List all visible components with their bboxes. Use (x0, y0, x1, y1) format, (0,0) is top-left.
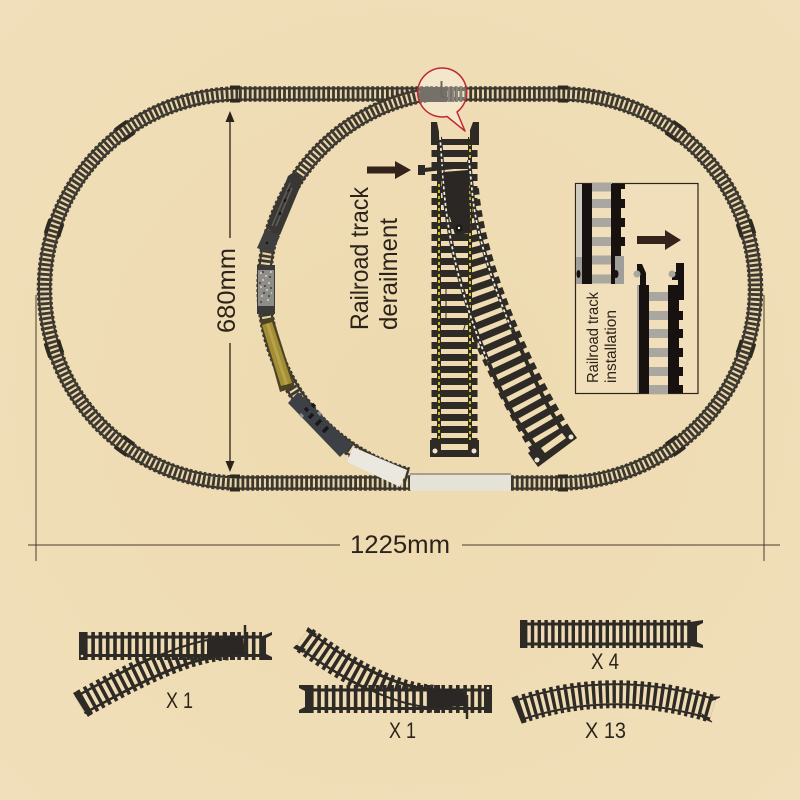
quantity label: X 4: X 4 (591, 649, 619, 674)
label: railroad track derailment: Railroad track (346, 187, 374, 330)
dark passenger coach (288, 392, 352, 457)
parts: left-hand turnout (73, 625, 272, 717)
locomotive (257, 172, 303, 254)
large turnout track (418, 122, 577, 467)
parts: curved track (512, 694, 720, 723)
parts: right-hand turnout (293, 627, 492, 719)
straight section (430, 122, 479, 457)
dimension: height 680mm (213, 111, 241, 472)
inset label (585, 291, 620, 383)
white coach one (347, 447, 407, 487)
quantity label: X 13: X 13 (585, 718, 626, 743)
outer oval track (44, 94, 755, 483)
label: railroad track derailment: derailment (375, 218, 403, 330)
inner curved branch track (264, 94, 430, 475)
inset label: installation (603, 310, 620, 383)
inset: railroad track installation (576, 184, 698, 394)
inset right track (634, 263, 684, 393)
inset label: Railroad track (585, 291, 602, 383)
switch lever (418, 165, 466, 332)
switch motor (443, 170, 471, 235)
callout bubble (418, 68, 467, 131)
coal wagon (257, 265, 275, 314)
pointer arrow to switch lever (367, 161, 411, 179)
inset left track (576, 184, 625, 284)
inset arrow (637, 230, 681, 250)
curved branch (440, 137, 577, 467)
white coach two (410, 473, 511, 491)
train (257, 172, 511, 491)
quantity label: X 1 right: X 1 (389, 718, 416, 743)
parts: straight track (520, 620, 703, 648)
quantity label: X 1 left: X 1 (166, 688, 193, 713)
dimension: width 1225mm: 1225mm (350, 531, 450, 559)
label: railroad track derailment (346, 187, 403, 330)
yellow tank wagon (260, 317, 295, 392)
dimension: height 680mm: 680mm (213, 248, 241, 333)
